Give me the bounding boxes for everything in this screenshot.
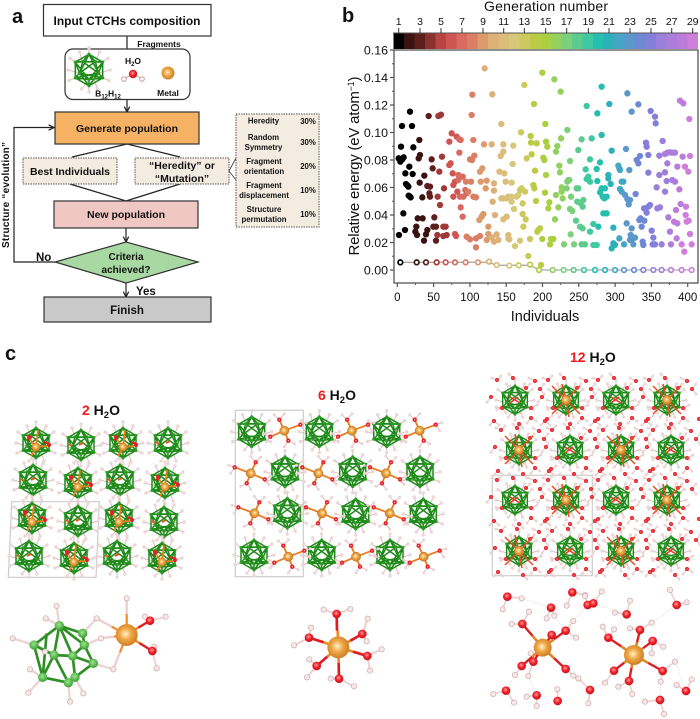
axis title: relative energy: −1 bbox=[346, 81, 356, 91]
x axis tick labels: 250 bbox=[569, 292, 588, 304]
panel: operator percentages: Fragment bbox=[246, 157, 282, 166]
box: generate population bbox=[55, 112, 199, 144]
panel: operator percentages: displacement bbox=[239, 191, 289, 200]
box: best individuals bbox=[23, 158, 117, 184]
y axis tick labels: 0.04 bbox=[364, 208, 388, 222]
label: no: No bbox=[36, 252, 51, 264]
crystal: 2 H2O bbox=[8, 422, 188, 579]
x axis tick labels: 100 bbox=[460, 292, 479, 304]
icon: B12H12 cage bbox=[68, 48, 110, 92]
panel: operator percentages: 30% bbox=[300, 138, 316, 147]
box: new population bbox=[54, 201, 198, 228]
panel: operator percentages: 30% bbox=[300, 117, 316, 126]
colour bar: 23 bbox=[624, 16, 636, 28]
x axis tick labels: 300 bbox=[606, 292, 625, 304]
y axis tick labels: 0.00 bbox=[364, 264, 388, 278]
box: heredity or mutation: “Mutation” bbox=[155, 173, 209, 185]
panel: operator percentages: permutation bbox=[241, 215, 287, 224]
molecule: 12 H2O close-up bbox=[491, 587, 694, 717]
heading: 2 H2O: 2 H bbox=[82, 402, 104, 418]
axis title: individuals: Individuals bbox=[511, 309, 579, 325]
axis title: relative energy: ) bbox=[346, 76, 363, 82]
box: generate population: Generate population bbox=[76, 123, 178, 135]
fragment labels: O bbox=[134, 56, 141, 66]
heading: 2 H2O: 2 bbox=[104, 410, 109, 421]
colour bar: 11 bbox=[498, 16, 509, 28]
label b: b bbox=[342, 5, 354, 27]
y axis tick labels: 0.12 bbox=[364, 98, 388, 112]
panel: operator percentages: Random bbox=[248, 133, 279, 142]
colour bar: 1 bbox=[396, 16, 402, 28]
label a: a bbox=[12, 6, 24, 28]
decision: criteria achieved bbox=[55, 242, 198, 283]
heading: 12 H2O: 12 H bbox=[570, 349, 600, 365]
panel: operator percentages: orientation bbox=[244, 167, 284, 176]
panel: operator percentages: Symmetry bbox=[245, 143, 283, 152]
panel b: scatter chart bbox=[342, 0, 699, 325]
colour bar: 15 bbox=[540, 16, 552, 28]
icon: water bbox=[122, 70, 144, 81]
callout pointer bbox=[229, 158, 236, 180]
x axis tick labels: 400 bbox=[678, 292, 697, 304]
colour bar: 9 bbox=[480, 16, 486, 28]
panel: operator percentages: 10% bbox=[300, 210, 316, 219]
axis title: relative energy: Relative energy (eV atom bbox=[346, 91, 363, 256]
y axis tick labels: 0.10 bbox=[364, 126, 388, 140]
icon: metal bbox=[162, 66, 174, 80]
label c: c bbox=[5, 343, 16, 365]
colour bar: 7 bbox=[459, 16, 465, 28]
colour bar: 17 bbox=[561, 16, 573, 28]
best-so-far line with hollow markers bbox=[398, 259, 694, 272]
fragment labels: H bbox=[125, 56, 131, 66]
fragment labels: 12 bbox=[114, 94, 121, 100]
colour bar: 25 bbox=[645, 16, 657, 28]
y axis tick labels: 0.06 bbox=[364, 181, 388, 195]
decision: criteria achieved: achieved? bbox=[102, 265, 150, 276]
x axis tick labels: 350 bbox=[642, 292, 661, 304]
y axis tick labels: 0.16 bbox=[364, 44, 388, 58]
colour bar: 27 bbox=[666, 16, 678, 28]
fragment labels bbox=[95, 56, 179, 100]
fragment labels: H bbox=[108, 88, 114, 98]
fragment labels: 12 bbox=[101, 94, 109, 100]
connector lines and arrows bbox=[14, 36, 180, 297]
molecule: 2 H2O close-up bbox=[10, 596, 168, 704]
panel c: crystal structures bbox=[5, 343, 700, 717]
panel: operator percentages: 20% bbox=[300, 162, 316, 171]
fragment labels: Metal bbox=[157, 88, 179, 98]
label: yes: Yes bbox=[136, 286, 156, 298]
x axis tick labels bbox=[394, 292, 697, 304]
box: finish: Finish bbox=[110, 305, 144, 317]
box: new population: New population bbox=[87, 209, 165, 221]
label: structure evolution: Structure “evolution” bbox=[1, 142, 12, 248]
fragment labels: 2 bbox=[131, 62, 135, 68]
y axis tick labels bbox=[364, 44, 388, 278]
colour bar: 3 bbox=[417, 16, 423, 28]
box: heredity or mutation: “Heredity” or bbox=[149, 160, 215, 172]
box: finish bbox=[44, 297, 211, 322]
panel: operator percentages bbox=[236, 114, 319, 227]
crystal: 12 H2O bbox=[487, 374, 700, 579]
colour bar: 29 bbox=[687, 16, 699, 28]
box: input bbox=[44, 4, 211, 36]
fragment labels: B bbox=[95, 88, 101, 98]
heading: 6 H2O: O bbox=[345, 387, 356, 403]
box: fragments bbox=[65, 48, 190, 100]
heading: 12 H2O: 2 bbox=[600, 357, 605, 368]
x axis tick labels: 50 bbox=[427, 292, 440, 304]
label: fragments: Fragments bbox=[137, 39, 181, 49]
box: heredity or mutation bbox=[135, 158, 229, 185]
crystal: 6 H2O bbox=[229, 410, 446, 577]
panel: operator percentages: Fragment bbox=[246, 181, 282, 190]
colour bar: 19 bbox=[582, 16, 594, 28]
heading: 2 H2O: O bbox=[109, 402, 120, 418]
colour bar: 21 bbox=[603, 16, 615, 28]
colour bar: 5 bbox=[438, 16, 444, 28]
heading: 6 H2O: 6 H bbox=[318, 387, 340, 403]
heading: 12 H2O: O bbox=[605, 349, 616, 365]
panel: operator percentages: Structure bbox=[247, 205, 282, 214]
panel: operator percentages: Heredity bbox=[248, 116, 280, 126]
scatter points bbox=[399, 68, 692, 265]
heading: 6 H2O: 2 bbox=[340, 395, 345, 406]
y axis tick labels: 0.08 bbox=[364, 154, 388, 168]
molecule: 6 H2O close-up bbox=[291, 606, 384, 689]
decision: criteria achieved: Criteria bbox=[108, 252, 144, 263]
box: best individuals: Best Individuals bbox=[30, 166, 110, 178]
y axis tick labels: 0.02 bbox=[364, 236, 388, 250]
x axis tick labels: 200 bbox=[533, 292, 552, 304]
panel a: workflow flowchart bbox=[1, 4, 319, 322]
y axis tick labels: 0.14 bbox=[364, 71, 388, 85]
box: input: Input CTCHs composition bbox=[54, 14, 200, 28]
colour bar bbox=[393, 16, 699, 49]
x axis tick labels: 0 bbox=[394, 292, 401, 304]
panel: operator percentages: 10% bbox=[300, 186, 316, 195]
x axis tick labels: 150 bbox=[497, 292, 516, 304]
plot frame and axes bbox=[390, 50, 698, 287]
colour bar: 13 bbox=[518, 16, 530, 28]
